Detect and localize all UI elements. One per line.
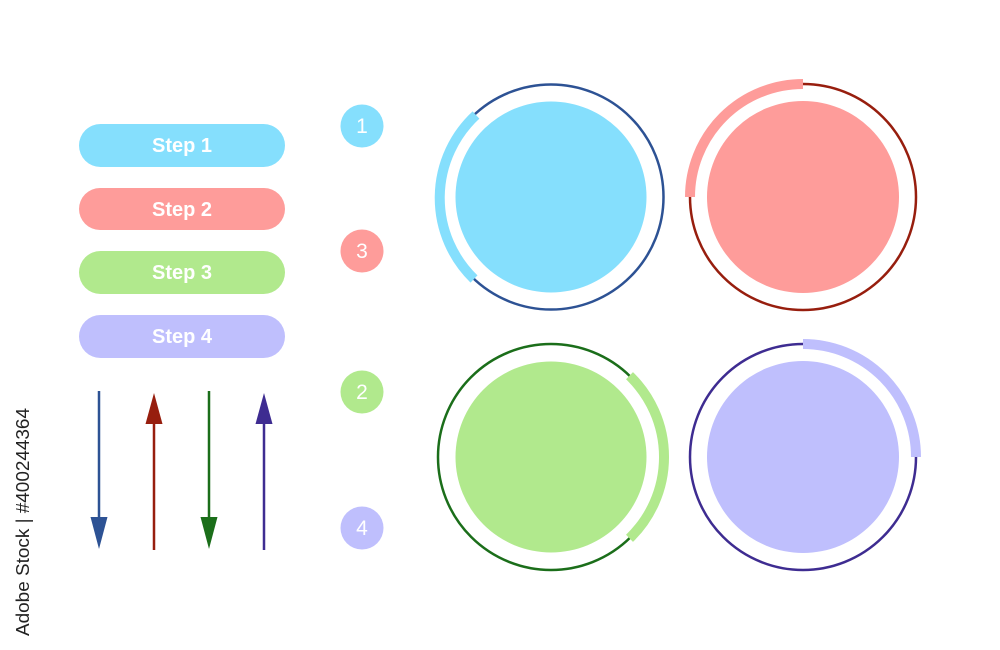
pill: Step 3	[79, 251, 285, 294]
circle: green	[438, 344, 664, 570]
badge 2: 2	[356, 381, 368, 404]
badge 4	[340, 506, 384, 550]
arrows	[90, 391, 272, 550]
badge 1: 1	[356, 115, 368, 138]
pill: Step 1	[79, 124, 285, 167]
pill: Step 3: Step 3	[152, 262, 212, 284]
pill: Step 4: Step 4	[152, 326, 213, 348]
circle: blue	[438, 84, 664, 310]
arrow: red up	[146, 393, 162, 550]
pill: Step 1: Step 1	[152, 135, 212, 157]
arrow: green down	[200, 391, 218, 549]
badge 3: 3	[356, 240, 368, 263]
vertical stock id text: Adobe Stock | #400244364	[12, 408, 33, 636]
pill: Step 2	[79, 188, 285, 230]
badge 3	[340, 230, 384, 272]
pill: Step 4	[79, 315, 285, 358]
arrow: purple up	[256, 393, 272, 550]
number badges	[340, 104, 384, 550]
badge 2	[340, 370, 384, 414]
circle: purple	[690, 344, 916, 570]
step pills	[79, 124, 285, 358]
circle: red	[690, 84, 916, 310]
arrow: blue down	[90, 391, 108, 549]
badge 1	[340, 104, 384, 148]
badge 4: 4	[356, 517, 368, 540]
pill: Step 2: Step 2	[152, 199, 212, 221]
